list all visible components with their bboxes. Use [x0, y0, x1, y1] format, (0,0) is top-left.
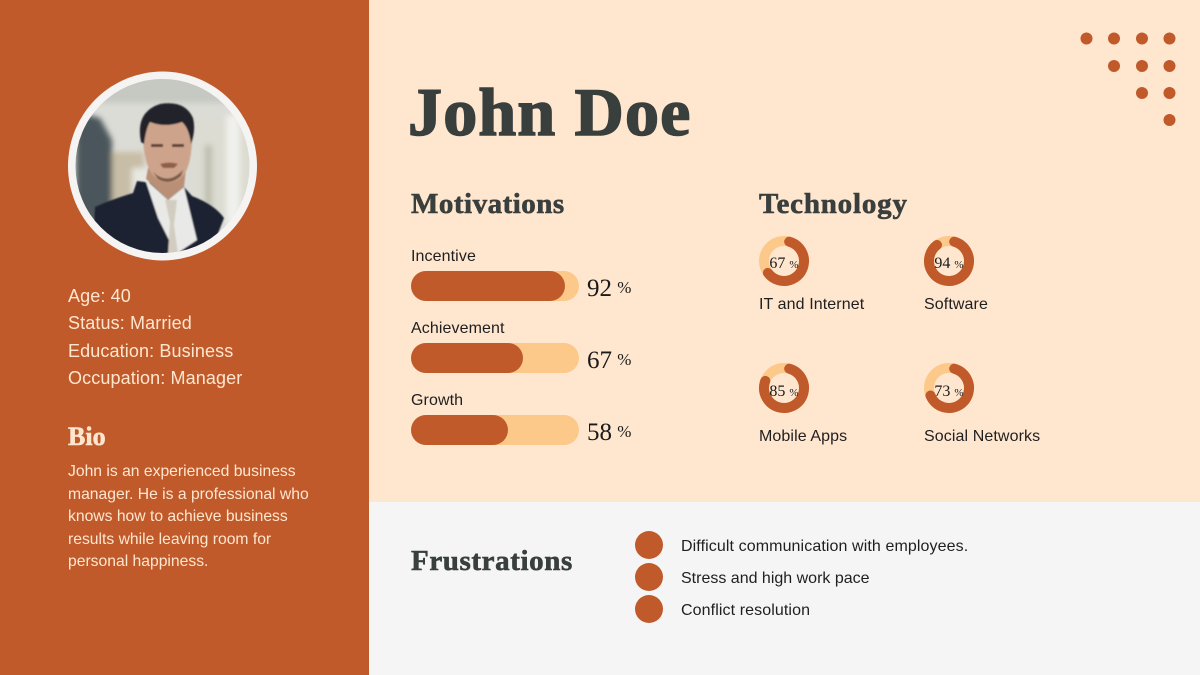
- frustrations heading: Frustrations: [411, 545, 573, 577]
- bullet: frustration 2: [635, 563, 663, 591]
- bio text: results while leaving room for: [68, 530, 271, 548]
- bar: growth: [411, 415, 579, 445]
- bio text: [68, 463, 309, 570]
- label: incentive: Incentive: [411, 248, 476, 265]
- donut: Social Networks: 73 %: [934, 383, 964, 400]
- bullet: frustration 3: [635, 595, 663, 623]
- profile details: [68, 286, 242, 388]
- value: growth: 58 %: [587, 419, 631, 446]
- donut: Social Networks: [924, 363, 974, 413]
- label: Mobile Apps: Mobile Apps: [759, 428, 847, 445]
- decorative dots: [1080, 32, 1176, 126]
- donut: IT and Internet: [759, 236, 810, 286]
- bar: achievement: [411, 343, 579, 373]
- label: growth: Growth: [411, 392, 463, 409]
- hair: [140, 103, 194, 144]
- profile details: Status: Married: [68, 313, 192, 333]
- bio text: personal happiness.: [68, 553, 208, 570]
- text: frustration 3: Conflict resolution: [681, 602, 810, 619]
- profile details: Education: Business: [68, 341, 233, 361]
- bullet: frustration 1: [635, 531, 663, 559]
- value: incentive: 92 %: [587, 275, 631, 302]
- donut: Mobile Apps: 85 %: [769, 383, 799, 400]
- bio text: John is an experienced business: [68, 463, 296, 480]
- label: Software: Software: [924, 296, 988, 313]
- bio heading: Bio: [68, 422, 106, 451]
- label: Social Networks: Social Networks: [924, 428, 1040, 445]
- label: IT and Internet: IT and Internet: [759, 296, 864, 313]
- suit: [92, 181, 224, 256]
- neck: [146, 168, 186, 200]
- shirt: [145, 179, 197, 254]
- bio text: knows how to achieve business: [68, 508, 288, 525]
- technology heading: Technology: [759, 188, 908, 220]
- text: frustration 2: Stress and high work pace: [681, 570, 870, 587]
- face: [143, 118, 192, 183]
- donut: IT and Internet: 67 %: [769, 255, 799, 272]
- bio text: manager. He is a professional who: [68, 486, 309, 502]
- title: John Doe: [408, 74, 692, 150]
- panel: frustrations background: [369, 502, 1200, 675]
- motivations heading: Motivations: [411, 188, 565, 220]
- label: achievement: Achievement: [411, 320, 505, 337]
- panel: left sidebar: [0, 0, 369, 675]
- donut: Software: [924, 236, 974, 286]
- portrait photo: [68, 72, 257, 260]
- value: achievement: 67 %: [587, 347, 631, 374]
- beard and features: [153, 170, 183, 182]
- text: frustration 1: Difficult communication with employees.: [681, 538, 968, 555]
- profile details: Age: 40: [68, 286, 131, 306]
- bar: incentive: [411, 271, 579, 301]
- donut: Software: 94 %: [934, 255, 964, 272]
- profile details: Occupation: Manager: [68, 368, 242, 388]
- donut: Mobile Apps: [758, 363, 810, 413]
